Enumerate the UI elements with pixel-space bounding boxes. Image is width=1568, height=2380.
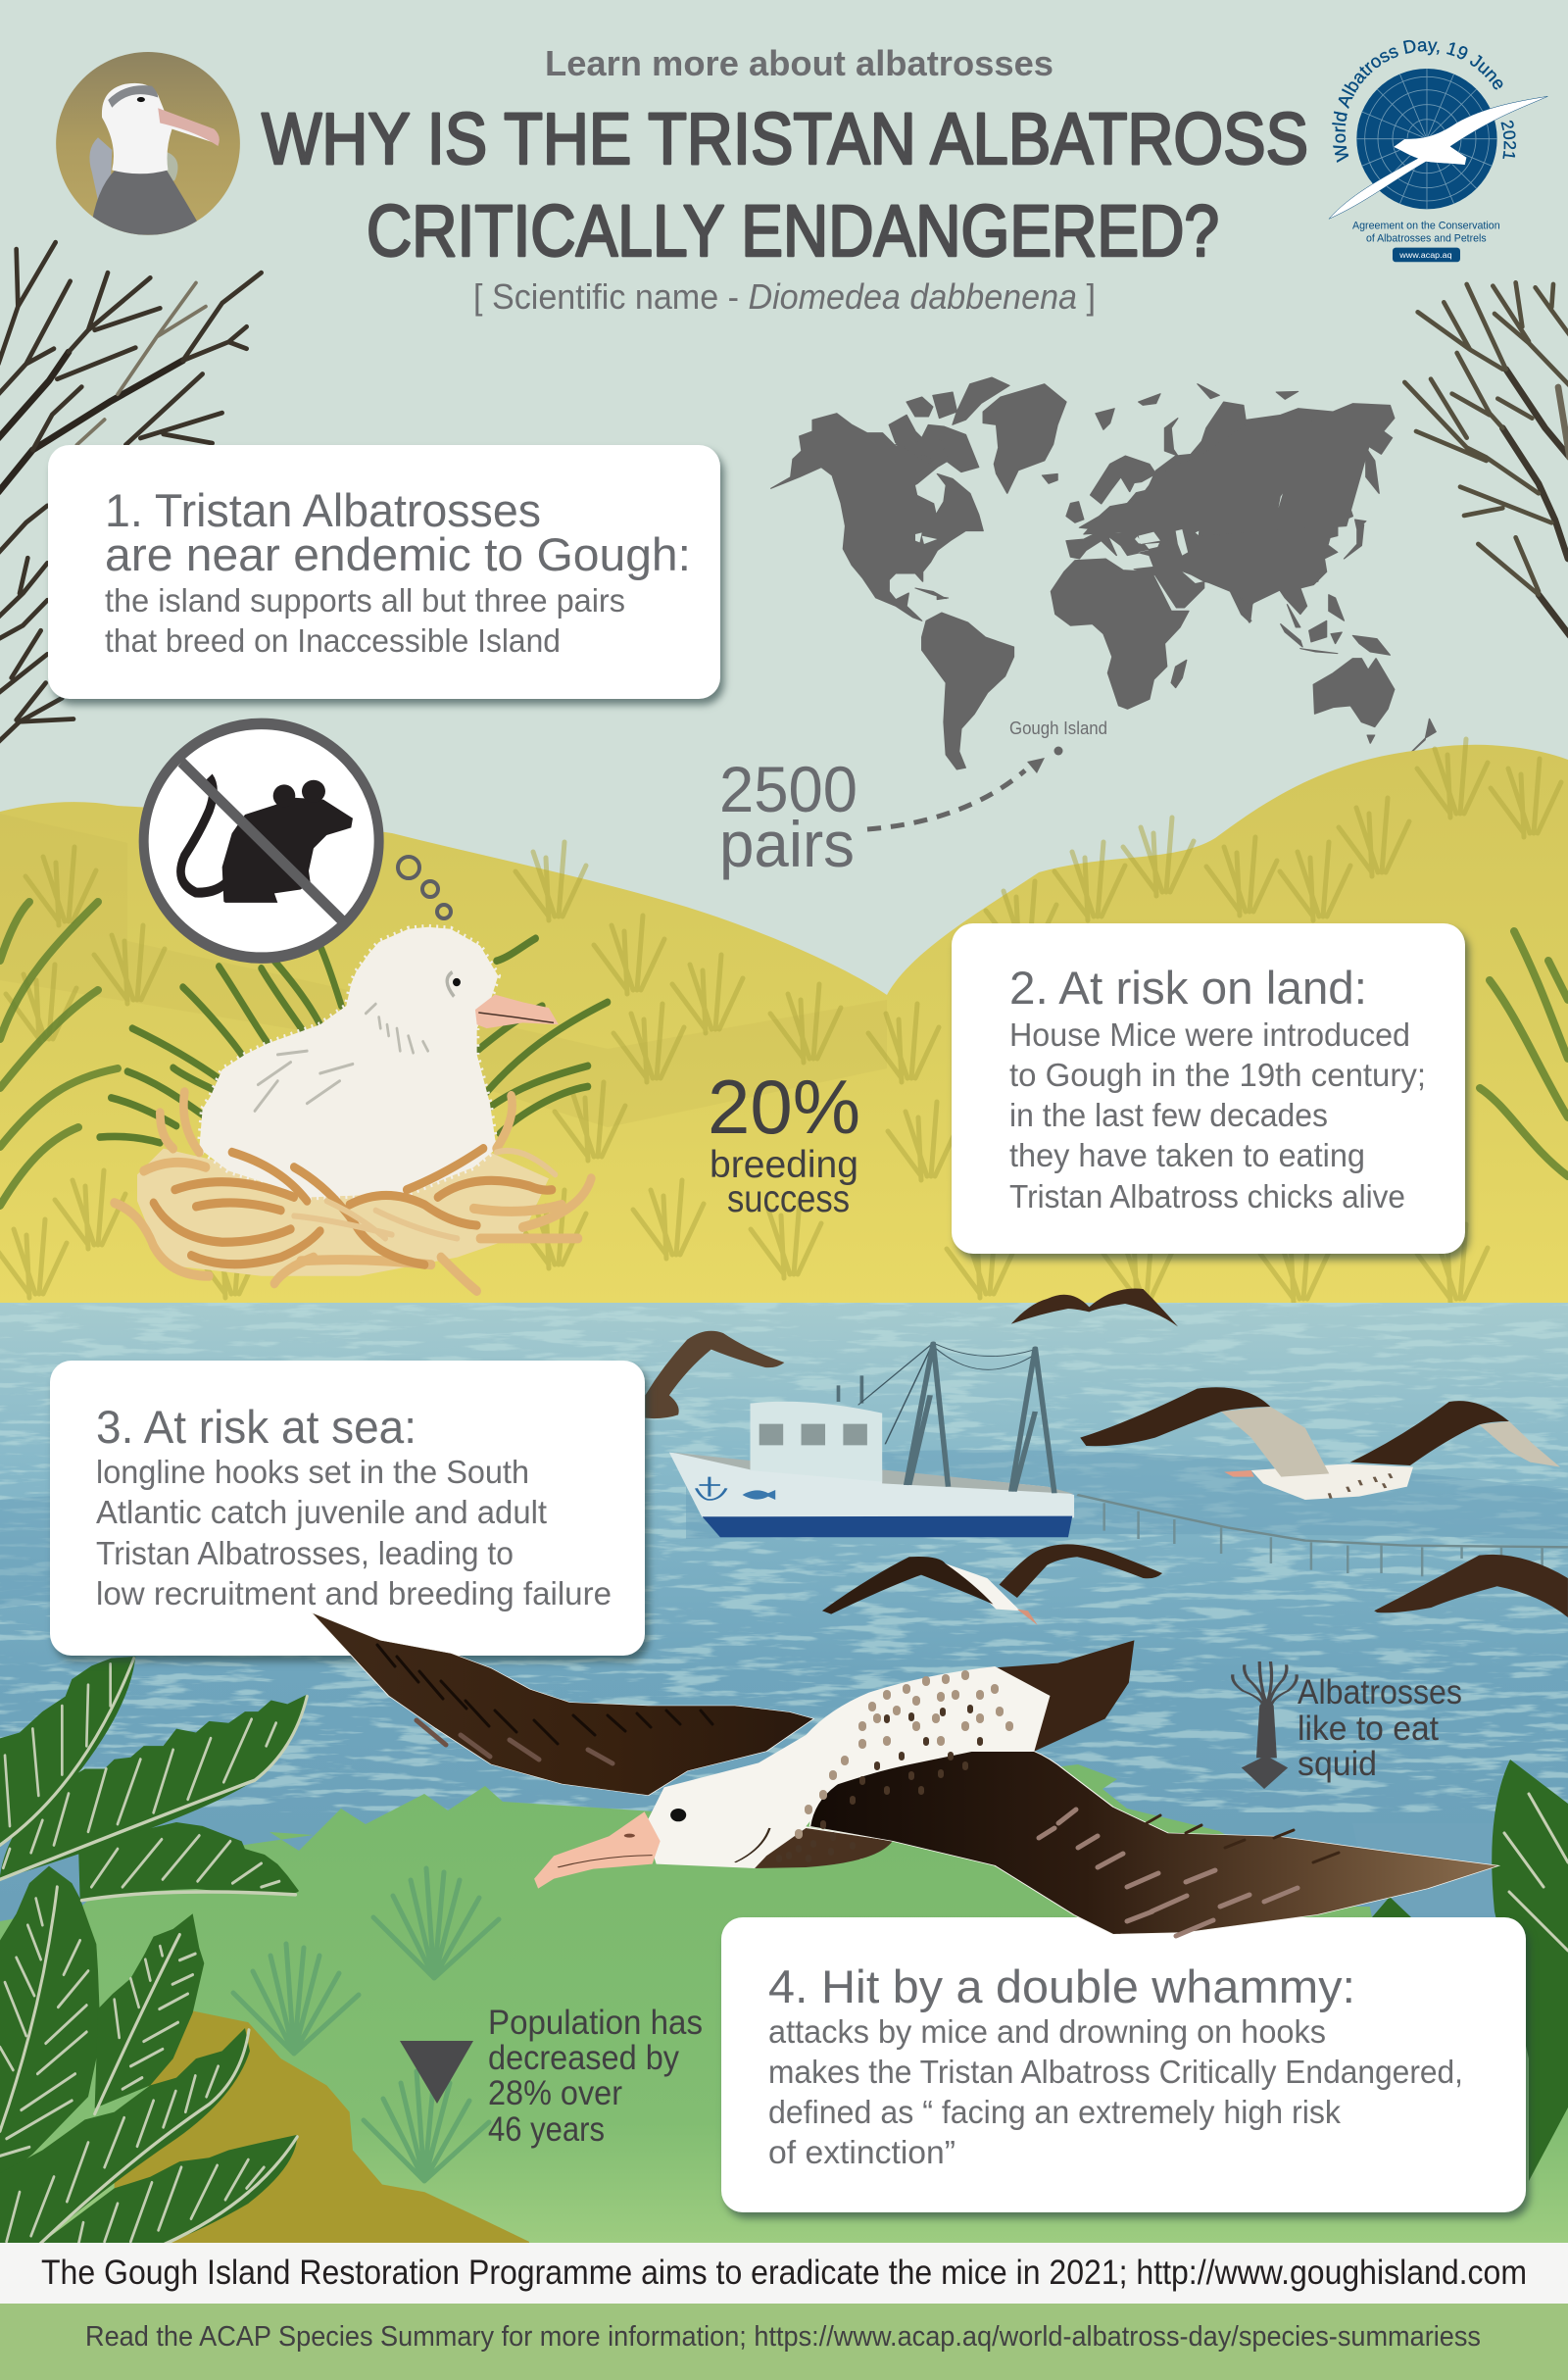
panel 3 heading: 3. At risk at sea: (96, 1401, 416, 1453)
veins (0, 1664, 279, 2245)
fishing boat (669, 1343, 1568, 1576)
logo: World Albatross Day: 2021 (1501, 120, 1517, 159)
body (645, 1666, 1050, 1868)
canadian arctic (889, 377, 1009, 472)
panel 1 heading: are near endemic to Gough: (105, 528, 691, 580)
population note: 28% over (488, 2074, 622, 2112)
population decrease arrow (400, 2041, 473, 2104)
population note: decreased by (488, 2039, 679, 2077)
left leaves (0, 1657, 307, 2245)
panel 2 text: they have taken to eating (1009, 1137, 1365, 1173)
islands (915, 384, 1436, 758)
panel 2 text (1009, 1016, 1426, 1215)
panel 1 text: that breed on Inaccessible Island (105, 622, 561, 659)
bird: lower right (1374, 1555, 1568, 1617)
inland seas (915, 475, 1283, 583)
panel 3 text: low recruitment and breeding failure (96, 1575, 612, 1611)
eye (670, 1809, 686, 1821)
panel 1 heading: 1. Tristan Albatrosses (105, 484, 541, 536)
russia and europe fill (1084, 419, 1377, 536)
label: Gough Island: Gough Island (1009, 719, 1107, 738)
branches: right (1404, 282, 1568, 635)
squid note (1298, 1673, 1462, 1783)
near wing (809, 1752, 1499, 1934)
beak (534, 1811, 661, 1889)
south america (922, 613, 1013, 769)
population note: Population has (488, 2004, 703, 2042)
panel 3 text (96, 1454, 612, 1611)
chick in nest (115, 927, 591, 1291)
hill shading (0, 814, 887, 1127)
squid note: like to eat (1298, 1710, 1439, 1748)
central asia fill (1153, 526, 1333, 605)
panel 1 text: the island supports all but three pairs (105, 582, 625, 619)
panel 2 text: in the last few decades (1009, 1097, 1328, 1133)
stat: 20% breeding success: success (727, 1178, 850, 1220)
panel 3 text: longline hooks set in the South (96, 1454, 529, 1490)
panel 3 (50, 1361, 645, 1656)
right leaves (1372, 1760, 1568, 2181)
nest grass (100, 938, 608, 1143)
bird: lower middle (822, 1544, 1162, 1625)
population note (488, 2004, 703, 2149)
far wing tip (991, 1640, 1134, 1752)
africa (1051, 559, 1189, 709)
squid icon (1233, 1661, 1297, 1789)
tail patch (755, 1828, 893, 1868)
blue behind right leaf (1352, 1823, 1499, 1917)
bird: left behind card (645, 1331, 784, 1418)
title (262, 98, 1308, 272)
panel 2 heading: 2. At risk on land: (1009, 962, 1367, 1014)
footer bar: restoration programme (0, 2243, 1568, 2304)
panel 4 (721, 1917, 1526, 2212)
nest straws (115, 1092, 591, 1291)
scandinavia (1091, 456, 1156, 504)
logo: World Albatross Day (1329, 39, 1548, 263)
land hills (0, 739, 1568, 1304)
panel 1 text (105, 582, 625, 659)
stat: 20% breeding success (708, 1064, 860, 1220)
green island (0, 1764, 1568, 2243)
title: WHY IS THE TRISTAN ALBATROSS (262, 98, 1308, 179)
dark grass left (0, 902, 1568, 1206)
grass tufts (0, 739, 1561, 1303)
bird: top (1011, 1289, 1178, 1326)
panel 2 text: House Mice were introduced (1009, 1016, 1410, 1053)
bird: right (1080, 1387, 1560, 1500)
panel 4 text: defined as “ facing an extremely high risk (768, 2094, 1341, 2130)
title: CRITICALLY ENDANGERED? (367, 190, 1219, 272)
australia (1313, 659, 1395, 727)
logo: World Albatross Day: of Albatrosses and Petrels (1366, 233, 1487, 245)
large albatross (312, 1612, 1499, 1936)
panel 3 text: Atlantic catch juvenile and adult (96, 1494, 547, 1530)
dry brush strokes (0, 1303, 1568, 1812)
no mice sign (144, 723, 379, 958)
population note: 46 years (488, 2110, 605, 2149)
body speckles (799, 1674, 1009, 1835)
stat: 2500 pairs: 2500 (719, 753, 858, 825)
distant birds and fishing boat (645, 1289, 1568, 1625)
eurasia (1066, 402, 1395, 622)
panel 1 heading (105, 484, 691, 580)
branches: left (0, 242, 262, 742)
panel 2 (952, 923, 1465, 1254)
north america (771, 414, 983, 620)
bird photo (56, 52, 240, 235)
panel 4 text: makes the Tristan Albatross Critically Endangered, (768, 2054, 1463, 2090)
stat: 20% breeding success: breeding (710, 1144, 858, 1186)
arrow to Gough Island (867, 747, 1062, 829)
heading: learn more: Learn more about albatrosses (545, 43, 1054, 83)
panel 4 text: of extinction” (768, 2134, 956, 2170)
greenland (983, 384, 1066, 493)
panel 1 (48, 445, 720, 699)
stat: 2500 pairs (719, 753, 858, 880)
stat: 2500 pairs: pairs (719, 808, 855, 880)
squid note: Albatrosses (1298, 1673, 1462, 1711)
footer bar: species summary: Read the ACAP Species Summary for more information; https://www.acap.aq/world-albatross-day/species-summariess (85, 2321, 1481, 2353)
stat: 20% breeding success: 20% (708, 1064, 860, 1150)
world map (771, 377, 1436, 769)
panel 4 text (768, 2013, 1463, 2170)
logo: World Albatross Day: www.acap.aq (1398, 250, 1452, 260)
mouse (180, 777, 353, 903)
logo: World Albatross Day: Agreement on the Conservation (1352, 220, 1500, 231)
panel 4 heading: 4. Hit by a double whammy: (768, 1960, 1355, 2012)
panel 2 text: Tristan Albatross chicks alive (1009, 1178, 1405, 1215)
thought bubbles (398, 857, 451, 918)
brown mound (115, 2010, 529, 2246)
wing feather marks (377, 1645, 1339, 1936)
footer bar: species summary (0, 2304, 1568, 2380)
panel 2 text: to Gough in the 19th century; (1009, 1057, 1426, 1093)
squid note: squid (1298, 1745, 1377, 1783)
logo: World Albatross Day: World Albatross Day, 19 June (1332, 39, 1503, 163)
panel 4 text: attacks by mice and drowning on hooks (768, 2013, 1326, 2050)
darker sea bands (0, 1450, 1568, 1608)
scientific name: [ Scientific name - Diomedea dabbenena ] (473, 276, 1096, 317)
chick body (199, 927, 498, 1197)
midribs (0, 1659, 307, 2245)
rear wing (312, 1612, 813, 1796)
sea (0, 1303, 1568, 1969)
pale grass tufts on green (233, 1868, 499, 2181)
panel 3 text: Tristan Albatrosses, leading to (96, 1535, 514, 1571)
